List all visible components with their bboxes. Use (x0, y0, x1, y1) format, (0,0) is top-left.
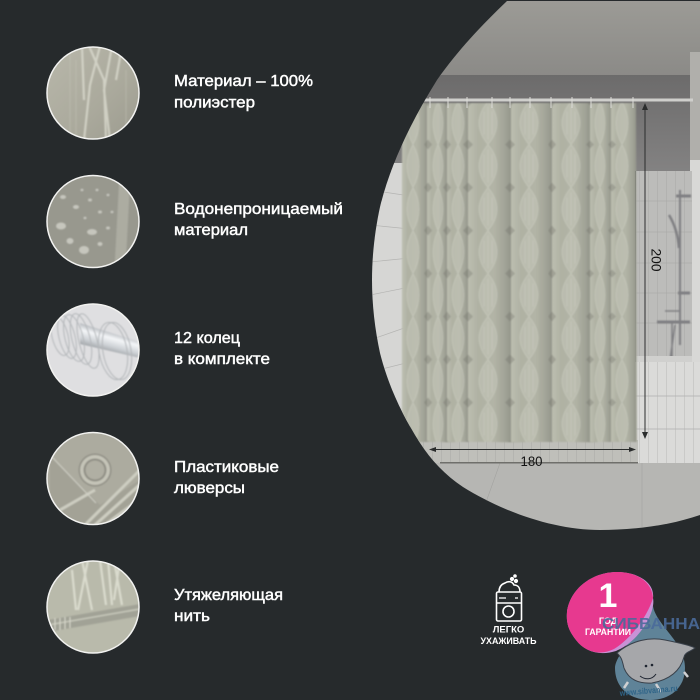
ceiling (440, 1, 700, 76)
label: easy care: УХАЖИВАТЬ (480, 636, 537, 647)
thumbnail: water drops (45, 173, 141, 269)
watermark: Sibvanna logo (602, 616, 700, 698)
badge: warranty: ГОД (599, 616, 618, 626)
logo url: www.sibvanna.ru (618, 683, 678, 698)
dimension: height (642, 103, 661, 439)
label: easy care (480, 624, 537, 647)
watermark: logo drop (615, 606, 685, 700)
bathtub mascot (617, 639, 695, 692)
thumbnail: hem thread (45, 559, 141, 655)
shower and tap (657, 190, 691, 360)
thumbnail: grommet (46, 432, 140, 526)
text: polyester: полиэстер (174, 94, 255, 112)
feature 1: material (45, 45, 313, 141)
text: 12 rings: 12 колец (174, 330, 240, 347)
dimension: width: 180 (520, 454, 542, 469)
dimension: width (429, 447, 636, 466)
feature 2: waterproof (45, 173, 343, 269)
curtain (402, 103, 637, 442)
text: waterproof: Водонепроницаемый (174, 201, 343, 218)
thumbnail: fabric weave (45, 45, 141, 141)
shower rod with rings (423, 97, 693, 108)
text: plastic grommets: люверсы (174, 480, 245, 497)
feature 5: weighted thread (45, 559, 283, 655)
text: waterproof: материал (174, 222, 248, 239)
right pillar (690, 52, 700, 365)
text: plastic grommets (174, 459, 279, 497)
thumbnail: rod and rings (45, 302, 141, 398)
upper wall (370, 75, 700, 171)
left tiled wall (372, 163, 410, 426)
text: waterproof (174, 201, 343, 239)
feature 3: rings (45, 302, 270, 398)
badge: warranty (567, 572, 653, 653)
text: polyester: Материал – 100% (174, 73, 313, 90)
text: 12 rings: в комплекте (174, 351, 270, 368)
feature 4: grommets (46, 432, 278, 526)
panel under curtain (410, 440, 638, 464)
text: plastic grommets: Пластиковые (174, 459, 279, 476)
text: weighted thread: Утяжеляющая (174, 587, 283, 604)
icon: washing machine (496, 575, 522, 621)
badge: warranty: ГАРАНТИИ (585, 627, 631, 637)
text: polyester (174, 73, 313, 112)
label: easy care: ЛЕГКО (493, 624, 524, 636)
text: weighted thread: нить (174, 608, 210, 625)
logo wordmark: СИБВАННА (602, 616, 700, 633)
bath panel (636, 356, 700, 463)
photo: bathroom with curtain (370, 0, 700, 533)
text: 12 rings (174, 330, 270, 368)
text: weighted thread (174, 587, 283, 625)
floor (435, 463, 700, 530)
badge: warranty: 1 (599, 577, 617, 615)
dimension: height: 200 (648, 248, 664, 272)
niche tiles (636, 171, 692, 361)
